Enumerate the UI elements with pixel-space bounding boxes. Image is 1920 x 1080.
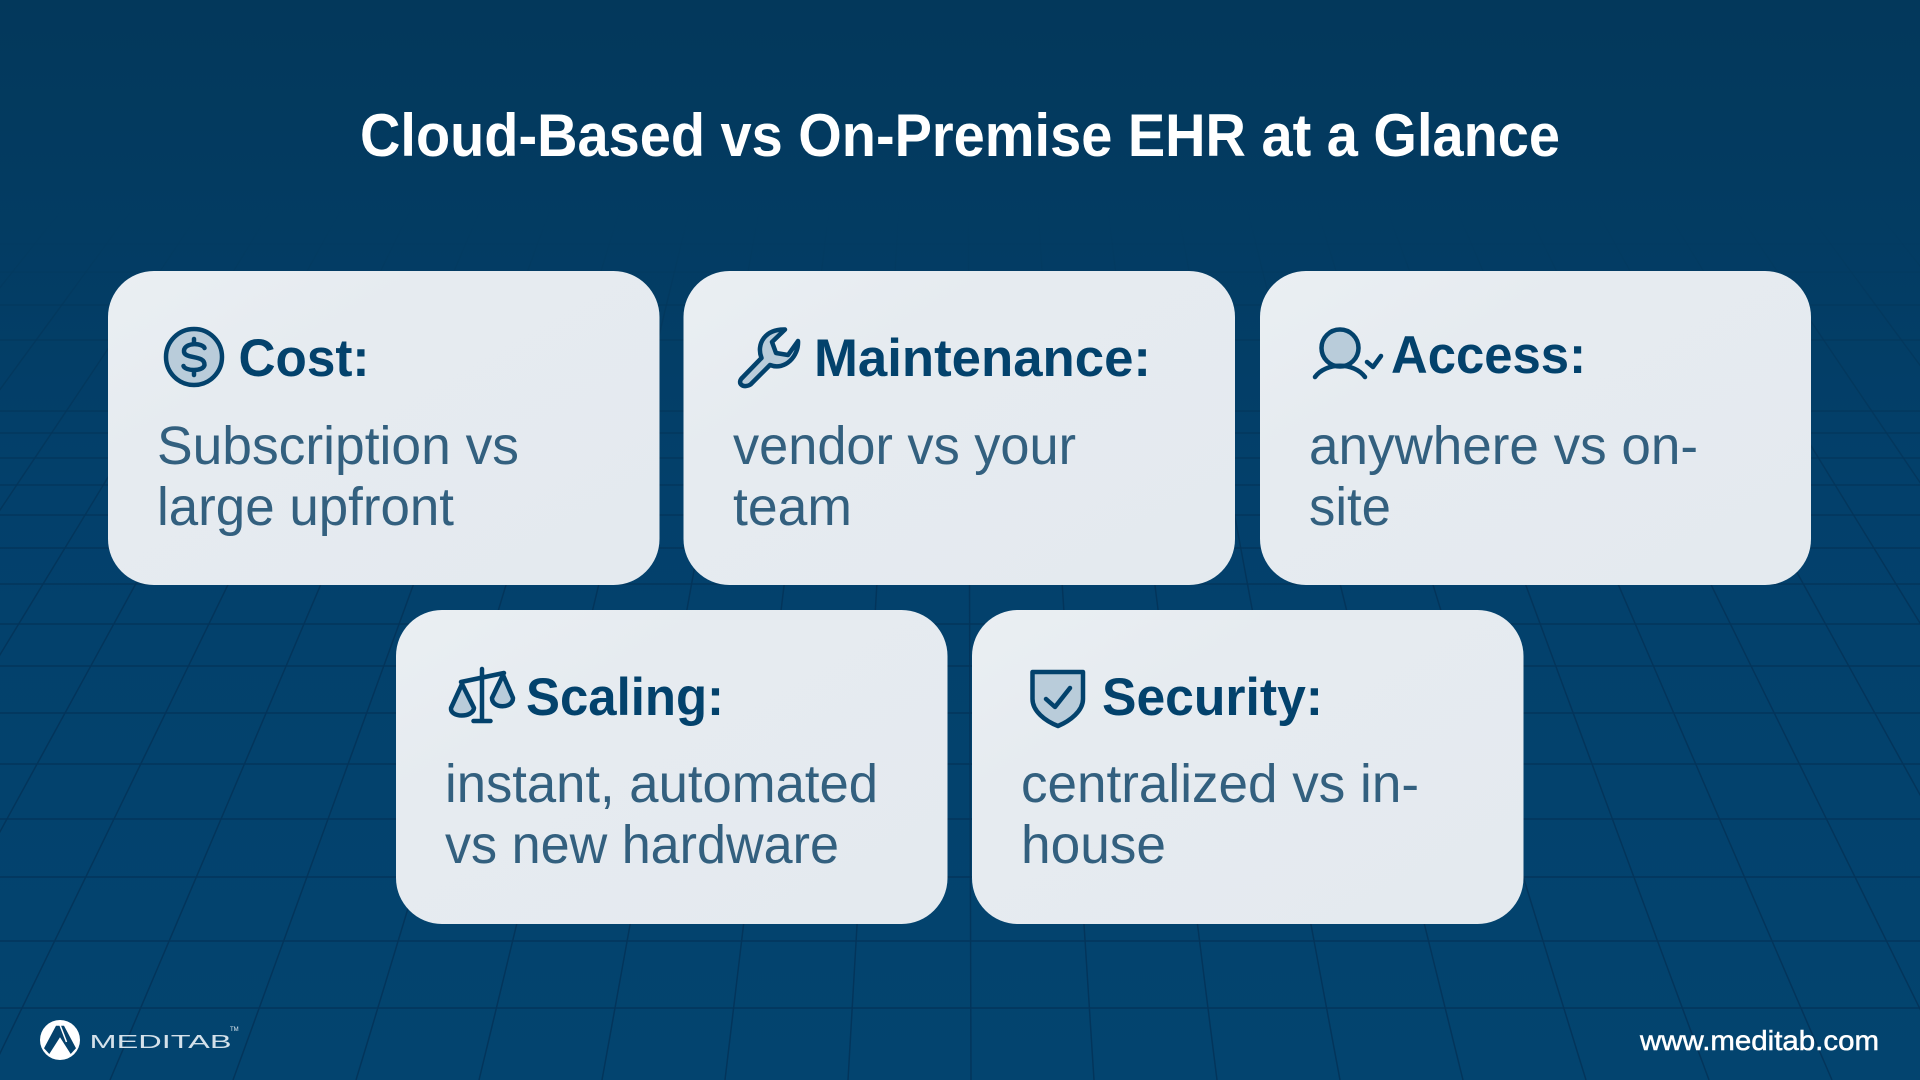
text: security details: centralized vs in- [1021,754,1419,814]
icon: logo mark [40,1020,80,1060]
text: scaling details: vs new hardware [445,815,839,875]
text: trademark: TM [230,1027,239,1033]
text: maintenance details: team [733,477,852,537]
panel: cost [108,271,660,585]
title: Cloud-Based vs On-Premise EHR at a Glance [360,102,1560,169]
text: cost details: Subscription vs [157,416,519,476]
text: access details: anywhere vs on- [1309,416,1698,476]
text: security details [1021,754,1419,875]
panel: maintenance [684,271,1235,585]
text: scaling details: instant, automated [445,754,878,814]
footer url: www.meditab.com [1639,1025,1879,1056]
panel: access [1260,271,1811,585]
icon: balance scale [451,669,513,721]
text: cost details: large upfront [157,477,454,537]
text: maintenance details [733,416,1076,537]
text: access details: site [1309,477,1391,537]
icon: wrench [740,329,798,386]
panel: scaling [396,610,948,924]
icon: dollar coin [166,329,222,385]
text: wordmark: MEDITAB [90,1031,232,1052]
heading: cost: Cost: [238,329,370,388]
logo: meditab [40,1020,239,1060]
icon: user check [1315,330,1381,377]
text: security details: house [1021,815,1166,875]
heading: scaling: Scaling: [526,668,724,727]
heading: maintenance: Maintenance: [814,329,1151,388]
panel: security [972,610,1524,924]
text: access details [1309,416,1698,537]
text: scaling details [445,754,878,875]
text: cost details [157,416,519,537]
text: maintenance details: vendor vs your [733,416,1076,476]
heading: security: Security: [1102,668,1323,727]
icon: shield check [1032,672,1083,726]
heading: access: Access: [1391,326,1586,385]
